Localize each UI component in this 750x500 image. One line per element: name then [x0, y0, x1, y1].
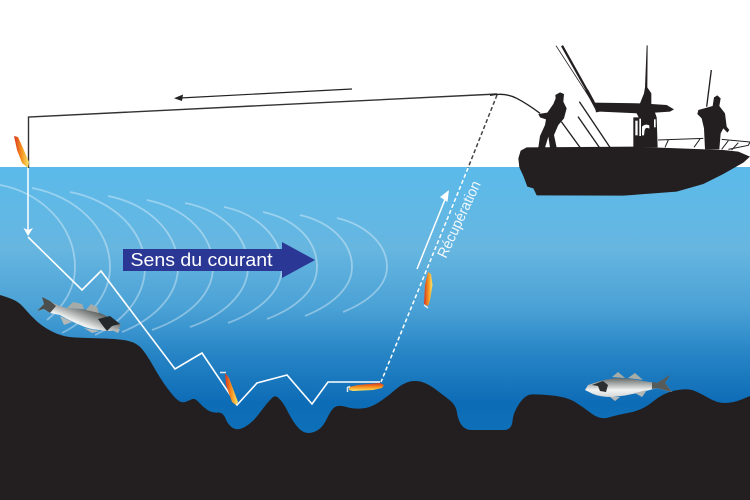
sea bass left	[37, 297, 121, 333]
angler standing on bow	[697, 95, 729, 149]
dashed retrieve line	[381, 95, 497, 382]
cast direction arrow	[174, 89, 352, 101]
bottom zigzag retrieve line	[28, 237, 380, 405]
angler fighting fish	[538, 92, 567, 148]
console and T-top	[594, 45, 674, 147]
white sink line with arrow	[24, 168, 33, 236]
windscreen openings	[635, 119, 656, 136]
hull	[518, 147, 750, 196]
retrieve label: Récupération	[434, 178, 485, 261]
lure during retrieve	[424, 272, 432, 308]
lure at start of retrieve	[348, 383, 384, 392]
outrigger poles	[490, 46, 750, 150]
retrieve arrow	[417, 190, 449, 269]
sea bass right	[585, 372, 672, 401]
fishing line above water	[28, 94, 497, 168]
boat with anglers	[490, 45, 750, 196]
current wave arcs	[0, 185, 387, 335]
bow rail	[658, 138, 750, 150]
lure on the bottom	[220, 372, 238, 405]
seabed	[0, 295, 750, 500]
lure at the surface	[14, 136, 29, 168]
water	[0, 167, 750, 500]
rod and line	[490, 94, 540, 113]
current direction arrow: Sens du courant	[130, 249, 272, 270]
current direction arrow	[123, 242, 315, 278]
